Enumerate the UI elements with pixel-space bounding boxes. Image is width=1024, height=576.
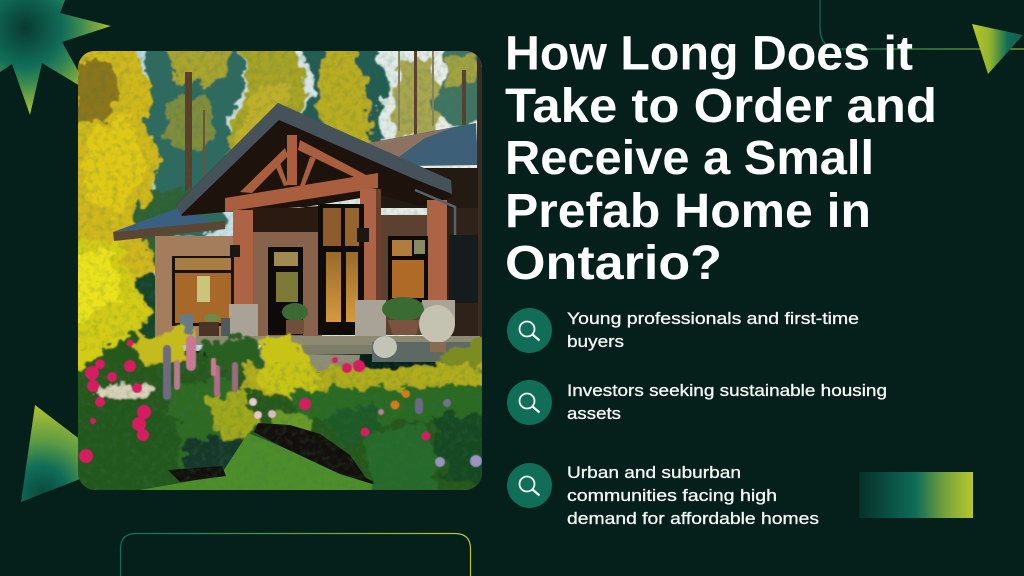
middle windows and door (268, 204, 364, 335)
text 2: Investors seeking sustainable housing (567, 382, 887, 400)
tree trunks (185, 51, 466, 192)
lanterns (230, 228, 369, 257)
gutter (414, 189, 456, 235)
list item 3 (507, 463, 819, 528)
background conifers (140, 40, 490, 240)
icon: magnifier 2 (507, 380, 552, 425)
title: Prefab Home in (505, 184, 871, 238)
right windows (388, 235, 478, 303)
decorative triangle top right (972, 24, 1023, 74)
text 1 (567, 310, 859, 351)
foliage flecks over trees (78, 51, 478, 351)
mulch (254, 423, 374, 484)
decorative outline bottom (120, 534, 470, 576)
left column (233, 210, 253, 306)
text 3: demand for affordable homes (567, 510, 819, 528)
list item 2 (507, 380, 887, 425)
decorative gradient rectangle (859, 472, 973, 518)
decorative star shape (0, 0, 111, 115)
icon: magnifier 1 (507, 308, 552, 353)
house wall left tan (155, 236, 235, 338)
lupins (163, 335, 423, 414)
decorative triangle left (21, 405, 90, 502)
lower left roof (113, 208, 212, 232)
middle column (360, 189, 376, 301)
foliage flecks over garden (78, 362, 482, 490)
right column (427, 200, 447, 300)
right shrubs (324, 402, 482, 490)
stone column bases (229, 300, 455, 338)
left window (172, 256, 234, 326)
text 3: communities facing high (567, 487, 777, 505)
title: How Long Does it (505, 26, 913, 80)
gable underside (176, 103, 444, 216)
pink flowers (79, 340, 430, 463)
terrace and steps (170, 336, 480, 372)
house wall centre (250, 228, 322, 336)
decorative outline top right (820, 0, 1024, 49)
list item 1 (507, 308, 859, 353)
garden foliage (78, 324, 482, 490)
title (505, 26, 937, 290)
lawn (140, 433, 391, 490)
timber truss (225, 135, 378, 212)
dark trunk at right edge (477, 51, 482, 490)
title: Receive a Small (505, 131, 874, 185)
roof fascia (176, 103, 452, 215)
text 3 (567, 464, 819, 528)
patio chairs and planter (180, 314, 230, 336)
pale and orange flowers (249, 390, 482, 467)
text 2: assets (567, 405, 621, 423)
title: Take to Order and (505, 79, 937, 133)
text 2 (567, 382, 887, 423)
text 1: Young professionals and first-time (567, 310, 859, 328)
sky (78, 51, 482, 351)
title: Ontario? (505, 236, 722, 290)
icon: magnifier 3 (507, 463, 552, 508)
text 3: Urban and suburban (567, 464, 741, 482)
photo: prefab house in garden (78, 51, 482, 490)
text 1: buyers (567, 333, 624, 351)
main roof right (368, 123, 478, 166)
yellow tree left (78, 51, 193, 373)
potted plants and urns (282, 297, 455, 358)
